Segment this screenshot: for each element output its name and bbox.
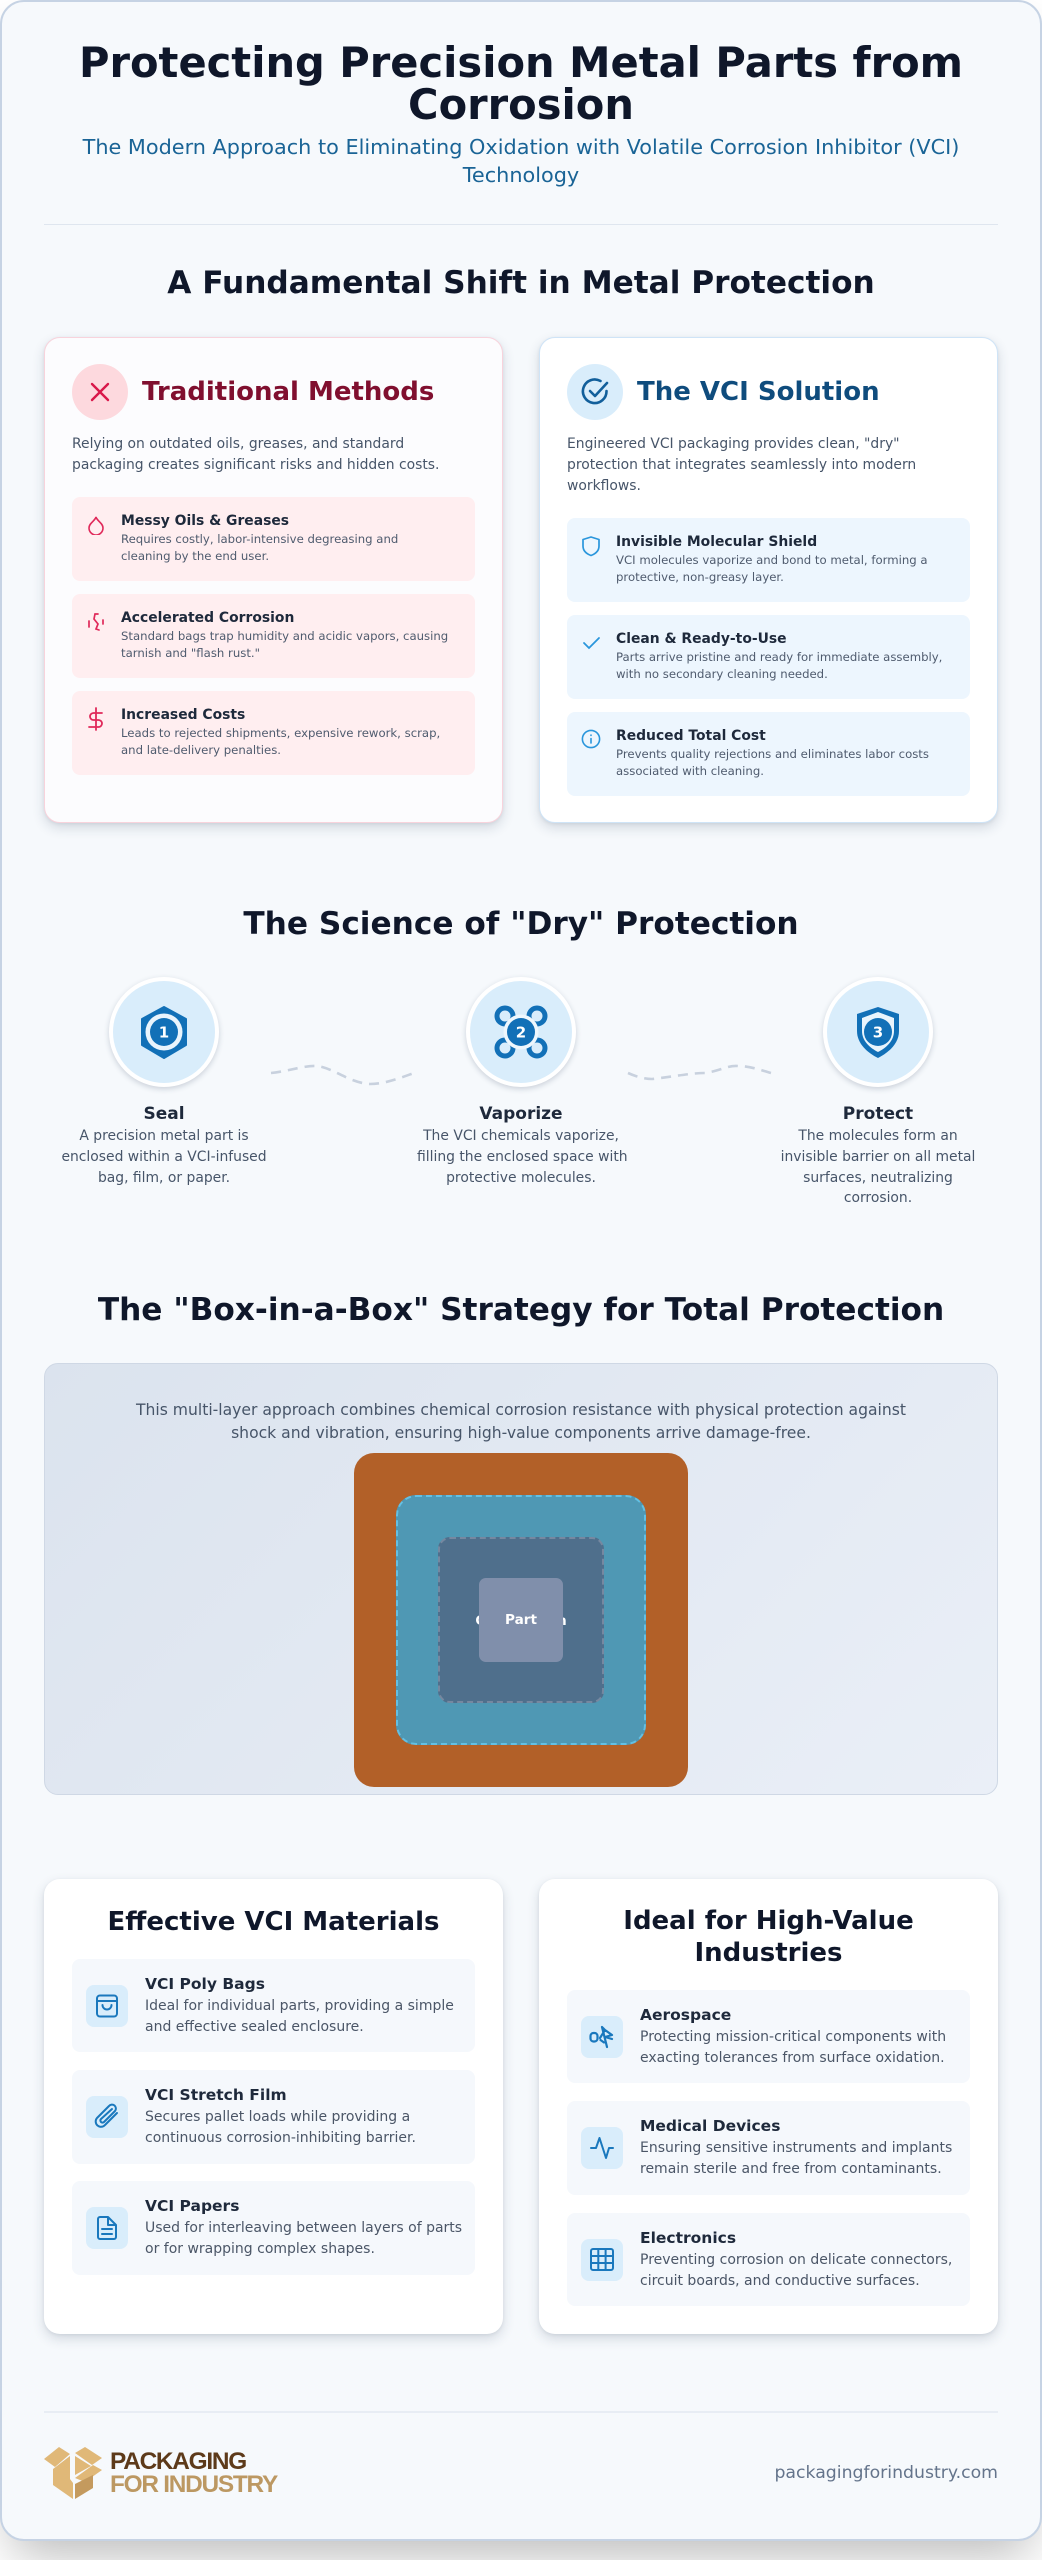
item text: Ensuring sensitive instruments and implants [640, 2140, 952, 2156]
item text: with no secondary cleaning needed. [616, 667, 828, 681]
icon: hexagon number 1 [109, 977, 219, 1087]
step 1: seal [61, 976, 267, 1186]
step text [781, 1128, 975, 1206]
heading: materials: Effective VCI Materials [108, 1907, 439, 1937]
item text [616, 747, 929, 778]
logo text: for industry: FOR INDUSTRY [110, 2470, 277, 2498]
description: VCI solution: Engineered VCI packaging provides clean, "dry" [567, 436, 900, 452]
item text [121, 532, 398, 563]
item text [640, 2029, 946, 2066]
icon: cross in circle [72, 364, 128, 420]
item text: Parts arrive pristine and ready for immediate assembly, [616, 650, 942, 664]
item text: Used for interleaving between layers of parts [145, 2220, 462, 2236]
item title: Accelerated Corrosion [121, 610, 294, 626]
arrow: connector 2 [628, 1064, 772, 1080]
step title: Vaporize [479, 1104, 563, 1124]
item text [121, 629, 448, 660]
item title: Electronics [640, 2229, 736, 2247]
item title: VCI Stretch Film [145, 2086, 287, 2104]
step text: invisible barrier on all metal [781, 1149, 975, 1165]
icon: shield number 3: 3 [873, 1024, 883, 1042]
description: VCI solution [567, 436, 916, 494]
icon: shield [582, 536, 600, 556]
icon: info [582, 730, 600, 748]
icon: check [583, 637, 600, 650]
icon: pulse [581, 2127, 623, 2169]
step text: The molecules form an [798, 1128, 958, 1144]
item text: Prevents quality rejections and eliminates labor costs [616, 747, 929, 761]
item text: and effective sealed enclosure. [145, 2019, 364, 2035]
icon: bag [86, 1985, 128, 2027]
title: Corrosion [408, 80, 634, 129]
title: Protecting Precision Metal Parts from [79, 38, 963, 87]
item text: Secures pallet loads while providing a [145, 2109, 410, 2125]
heading: VCI solution: The VCI Solution [637, 377, 880, 407]
item: electronics [567, 2213, 970, 2306]
step text: protective molecules. [446, 1170, 596, 1186]
item title: VCI Papers [145, 2197, 239, 2215]
step text: filling the enclosed space with [417, 1149, 628, 1165]
arrow: connector 1 [271, 1064, 412, 1086]
item title: Increased Costs [121, 707, 245, 723]
icon: hexagon number 1: 1 [159, 1024, 169, 1042]
layer: inner layer [438, 1537, 604, 1703]
icon: paperclip [86, 2096, 128, 2138]
item: messy oils [72, 497, 475, 581]
item text: VCI molecules vaporize and bond to metal, forming a [616, 553, 928, 567]
icon: document [86, 2207, 128, 2249]
panel: traditional methods [44, 337, 503, 823]
subtitle: The Modern Approach to Eliminating Oxidation with Volatile Corrosion Inhibitor (VCI) [83, 135, 959, 159]
item title: Messy Oils & Greases [121, 513, 289, 529]
panel: high-value industries [539, 1879, 998, 2334]
step text: corrosion. [844, 1190, 912, 1206]
item text: and late-delivery penalties. [121, 743, 281, 757]
panel: effective VCI materials [44, 1879, 503, 2334]
core: part: Part [505, 1612, 537, 1628]
description: VCI solution: protection that integrates seamlessly into modern [567, 457, 916, 473]
item: clean and ready [567, 615, 970, 699]
step text: The VCI chemicals vaporize, [423, 1128, 619, 1144]
item text [121, 726, 440, 757]
heading: traditional methods: Traditional Methods [142, 377, 434, 407]
subtitle: Technology [463, 163, 579, 187]
item text: continuous corrosion-inhibiting barrier. [145, 2130, 416, 2146]
item: papers [72, 2181, 475, 2275]
panel: box-in-a-box diagram [44, 1363, 998, 1795]
item title: Medical Devices [640, 2117, 780, 2135]
item: accelerated corrosion [72, 594, 475, 678]
subtitle [82, 135, 959, 187]
description: multi-layer approach: This multi-layer approach combines chemical corrosion resistance with physical protection against [136, 1401, 906, 1419]
item title: Invisible Molecular Shield [616, 534, 817, 550]
item text: Standard bags trap humidity and acidic vapors, causing [121, 629, 448, 643]
icon: circuit grid [581, 2239, 623, 2281]
step text: A precision metal part is [79, 1128, 249, 1144]
item: poly bags [72, 1959, 475, 2052]
item: increased costs [72, 691, 475, 775]
website url: packagingforindustry.com [774, 2463, 998, 2483]
core: part [479, 1578, 563, 1662]
item: reduced cost [567, 712, 970, 796]
item text: remain sterile and free from contaminants. [640, 2161, 942, 2177]
icon: aerospace [581, 2016, 623, 2058]
heading: industries: Ideal for High-Value [623, 1906, 914, 1936]
item title: Aerospace [640, 2006, 731, 2024]
item text [145, 2220, 462, 2257]
item text: tarnish and "flash rust." [121, 646, 260, 660]
item text: protective, non-greasy layer. [616, 570, 784, 584]
item: aerospace [567, 1990, 970, 2083]
heading: fundamental shift: A Fundamental Shift in Metal Protection [167, 265, 875, 301]
icon: shield number 3 [823, 977, 933, 1087]
icon: molecules number 2 [466, 977, 576, 1087]
step text [61, 1128, 267, 1186]
item title: Reduced Total Cost [616, 728, 766, 744]
heading: industries: Industries [694, 1938, 843, 1968]
item text [640, 2252, 952, 2289]
item text: Preventing corrosion on delicate connectors, [640, 2252, 952, 2268]
step text: enclosed within a VCI-infused [61, 1149, 267, 1165]
item text: circuit boards, and conductive surfaces. [640, 2273, 920, 2289]
step text: bag, film, or paper. [98, 1170, 230, 1186]
description: traditional methods: Relying on outdated oils, greases, and standard [72, 436, 404, 452]
icon: check in circle [567, 364, 623, 420]
item text [640, 2140, 952, 2177]
heading: industries [623, 1906, 914, 1968]
item: molecular shield [567, 518, 970, 602]
item text: Protecting mission-critical components with [640, 2029, 946, 2045]
item text: exacting tolerances from surface oxidation. [640, 2050, 945, 2066]
icon: dollar [88, 707, 103, 731]
item: stretch film [72, 2070, 475, 2164]
item text [145, 2109, 416, 2146]
description: traditional methods [72, 436, 439, 473]
item text [616, 650, 942, 681]
item text [616, 553, 928, 584]
description: multi-layer approach: shock and vibration, ensuring high-value components arrive damage-free. [231, 1424, 811, 1442]
item text: Requires costly, labor-intensive degreasing and [121, 532, 398, 546]
item text: cleaning by the end user. [121, 549, 269, 563]
item text: Ideal for individual parts, providing a simple [145, 1998, 454, 2014]
item text: or for wrapping complex shapes. [145, 2241, 375, 2257]
item text: Leads to rejected shipments, expensive rework, scrap, [121, 726, 440, 740]
icon: open box [44, 2447, 102, 2499]
hidden layer label: Core Carton [475, 1613, 567, 1629]
description: traditional methods: packaging creates significant risks and hidden costs. [72, 457, 439, 473]
item text: associated with cleaning. [616, 764, 764, 778]
step 2: vaporize [417, 976, 628, 1186]
icon: droplet [88, 516, 104, 535]
step title: Seal [143, 1104, 185, 1124]
step text: surfaces, neutralizing [803, 1170, 953, 1186]
step 3: protect [781, 976, 975, 1206]
panel: the VCI solution [539, 337, 998, 823]
logo text: packaging: PACKAGING [110, 2448, 246, 2475]
title [79, 38, 963, 129]
layer: outer box [354, 1453, 688, 1787]
heading: box in a box: The "Box-in-a-Box" Strategy for Total Protection [98, 1292, 944, 1328]
description: VCI solution: workflows. [567, 478, 641, 494]
item text [145, 1998, 454, 2035]
icon: vapor [88, 613, 104, 631]
logo: packaging for industry [44, 2447, 278, 2499]
step title: Protect [843, 1104, 913, 1124]
layer: VCI layer [396, 1495, 646, 1745]
item: medical devices [567, 2101, 970, 2195]
description: multi-layer approach [136, 1401, 906, 1442]
step text [417, 1128, 628, 1186]
icon: molecules number 2: 2 [516, 1024, 526, 1042]
item title: Clean & Ready-to-Use [616, 631, 787, 647]
heading: science of dry protection: The Science of "Dry" Protection [243, 906, 799, 942]
item title: VCI Poly Bags [145, 1975, 265, 1993]
